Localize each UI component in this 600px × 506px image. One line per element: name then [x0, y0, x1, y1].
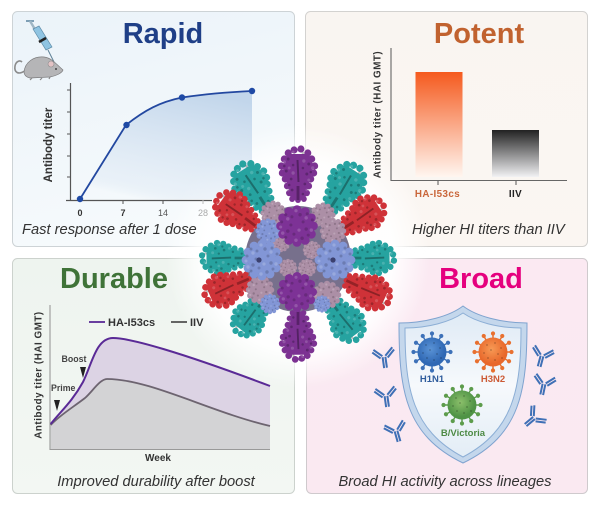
chart: rapid antibody titer curve: 28 [198, 208, 208, 218]
heading: Broad: Broad [439, 263, 523, 295]
virus: H1N1 [411, 331, 453, 385]
icon: shield with viruses [399, 306, 527, 463]
heading: Durable: Durable [60, 263, 168, 295]
center glow [166, 124, 430, 388]
chart: durable line chart: Prime [51, 383, 76, 393]
icon: syringe [26, 21, 54, 62]
heading: Rapid: Rapid [123, 18, 203, 50]
chart: rapid antibody titer curve: 7 [120, 208, 126, 218]
chart: rapid antibody titer curve [43, 83, 255, 218]
chart: durable line chart: HA-I53cs [108, 317, 155, 329]
virus: H3N2: H3N2 [481, 374, 505, 385]
virus: H1N1: H1N1 [420, 374, 445, 385]
icon: mouse [15, 57, 63, 80]
virus: H3N2 [472, 331, 514, 385]
panel: Potent background [306, 12, 588, 246]
core: purple subunits [276, 205, 318, 312]
caption: Durable: Improved durability after boost [57, 474, 256, 490]
core: lavender subunits [242, 218, 355, 314]
virus: B/Victoria [441, 384, 486, 439]
panel: Broad background [306, 258, 588, 494]
chart: potent bar chart: IIV [509, 189, 522, 200]
chart: potent bar chart: HA-I53cs [415, 189, 460, 200]
chart: rapid antibody titer curve: 14 [158, 208, 168, 218]
spike: teal arms [199, 152, 397, 352]
chart: potent bar chart [372, 48, 567, 200]
panel: Rapid background [12, 12, 294, 246]
chart: durable line chart: Boost [62, 354, 86, 364]
heading: Potent: Potent [434, 18, 524, 50]
core: mauve subunits [246, 200, 346, 309]
virus: B/Victoria: B/Victoria [441, 428, 486, 439]
spike: purple arms [278, 145, 318, 363]
icons: antibodies [372, 345, 557, 445]
chart: potent bar chart: Antibody titer (HAI GMT) [372, 51, 384, 178]
chart: rapid antibody titer curve: Antibody titer [43, 107, 55, 182]
spike: red arms [195, 181, 400, 319]
chart: durable line chart: IIV [190, 317, 204, 329]
chart: durable line chart: Week [145, 453, 171, 464]
chart: rapid antibody titer curve: 0 [77, 208, 83, 218]
caption: Rapid: Fast response after 1 dose [22, 222, 197, 238]
nanoparticle illustration [195, 145, 400, 363]
panel: Durable background [12, 258, 294, 494]
chart: durable line chart: Antibody titer (HAI GMT) [34, 311, 44, 439]
caption: Broad: Broad HI activity across lineages [338, 474, 552, 490]
chart: durable line chart [34, 305, 270, 464]
caption: Potent: Higher HI titers than IIV [412, 222, 566, 238]
